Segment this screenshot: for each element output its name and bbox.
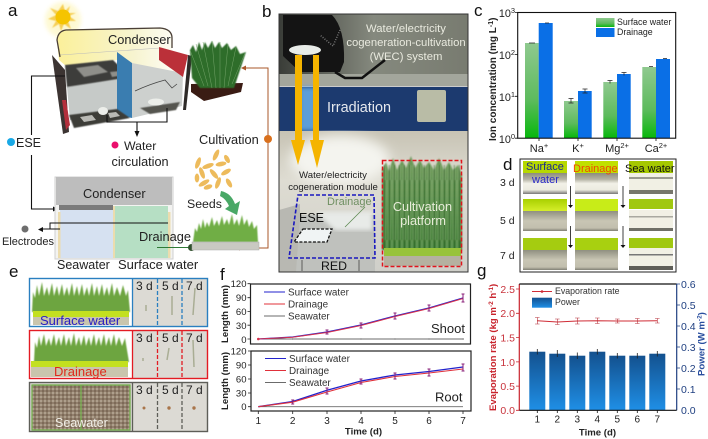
- y-axis title: Ion concentration (mg L: [488, 27, 499, 141]
- x-axis labels: K: [572, 143, 579, 155]
- y-axis ticks: [499, 6, 515, 146]
- y-axis ticks: 0: [511, 132, 515, 141]
- x-axis labels: 6: [635, 414, 641, 426]
- frame: [57, 28, 172, 57]
- y-axis ticks: 2: [511, 48, 515, 57]
- legend: [532, 286, 620, 308]
- y-axis ticks: [231, 346, 246, 413]
- bars: drainage: [539, 23, 670, 138]
- title: WEC system: (WEC) system: [370, 51, 442, 63]
- line: seawater: [258, 406, 463, 408]
- label: ESE: ESE: [299, 211, 324, 225]
- x-axis labels: 7: [655, 414, 661, 426]
- label: Root: Root: [435, 390, 463, 405]
- right axis title: ): [696, 312, 708, 315]
- icon: grass tray: [190, 41, 246, 101]
- legend: Drainage: [289, 366, 330, 377]
- legend: Power: [555, 297, 580, 307]
- panel d: root growth photos: [500, 159, 676, 272]
- right axis ticks: 0.5: [681, 300, 696, 312]
- right axis ticks: 0.1: [681, 384, 696, 396]
- left axis title: -1: [488, 287, 495, 293]
- label: seawater and surface water chambers: Surface water: [118, 257, 199, 272]
- label: seawater and surface water chambers: [57, 257, 199, 272]
- arrow: seeds to grass: [220, 191, 240, 215]
- x-axis labels: 2+: [620, 141, 630, 150]
- error bars: evaporation: [535, 318, 660, 324]
- label: Cultivation platform: [393, 200, 452, 228]
- error bars: [291, 364, 464, 404]
- error bars: [529, 23, 667, 103]
- line: surface water: [258, 367, 463, 407]
- x-axis labels: Na: [530, 143, 544, 155]
- x-axis labels: [530, 141, 668, 155]
- y-axis title: Length (mm): [220, 352, 231, 410]
- labels: days: 7 d: [186, 331, 203, 345]
- label: Condenser (schematic): Condenser: [83, 186, 146, 201]
- row: seawater: [30, 382, 208, 432]
- connector: ESE to device: [32, 76, 65, 209]
- label: Cultivation platform: platform: [400, 214, 446, 228]
- legend: Seawater: [289, 378, 331, 389]
- y-axis ticks: 30: [236, 321, 246, 332]
- panel d: root growth photos: water: [531, 174, 559, 186]
- y-axis ticks: 90: [236, 293, 246, 304]
- label: RED: RED: [321, 259, 347, 273]
- y-axis ticks: 10: [499, 92, 511, 104]
- left water wall: [67, 78, 117, 120]
- legend: [264, 288, 350, 323]
- panel f: root length line chart: [220, 346, 471, 438]
- callout: module outline: [289, 195, 375, 258]
- y-axis ticks: [231, 279, 246, 346]
- label: Water/electricity cogeneration module: [288, 170, 378, 193]
- left axis ticks: 1.0: [500, 357, 515, 369]
- panel b: WEC system photo: [279, 14, 468, 273]
- y-axis ticks: 10: [499, 50, 511, 62]
- left axis title: ): [488, 284, 499, 287]
- label: Surface water: Surface water: [40, 313, 121, 328]
- panel g: evaporation and power chart: [488, 279, 708, 438]
- legend: Drainage: [288, 300, 329, 311]
- y-axis ticks: 90: [236, 360, 246, 372]
- schematic: condenser cross section: [55, 177, 173, 259]
- photo: cultivation grass: [382, 156, 462, 266]
- labels: days: 3 d: [136, 279, 153, 293]
- right axis ticks: 0.4: [681, 321, 696, 333]
- photo: upper wall: [279, 14, 468, 86]
- y-axis ticks: 120: [231, 346, 246, 358]
- x-axis labels: 2: [555, 414, 561, 426]
- arrows: irradiation: [291, 55, 324, 168]
- bars: surface water: [525, 43, 656, 138]
- label: Condenser: Condenser: [108, 32, 171, 47]
- legend: [596, 17, 671, 37]
- right axis ticks: 0.6: [681, 279, 696, 291]
- labels: days: 3 d: [136, 383, 153, 397]
- y-axis ticks: 30: [236, 388, 246, 400]
- legend: Surface water: [288, 288, 350, 299]
- right axis ticks: 0.2: [681, 363, 696, 375]
- column: sea water: [629, 161, 673, 270]
- y-axis ticks: 3: [511, 6, 515, 15]
- label: Water circulation: [112, 139, 169, 169]
- panel label a: a: [8, 1, 18, 20]
- label: Seawater: Seawater: [55, 416, 108, 430]
- panel label g: g: [477, 261, 486, 280]
- label: Water circulation: Water: [124, 139, 156, 153]
- left axis title: h: [488, 293, 499, 301]
- left axis title: Evaporation rate (kg m: [488, 307, 499, 411]
- panel label b: b: [262, 2, 271, 21]
- panel e: seedling photos: [30, 278, 208, 432]
- right axis ticks: 0.3: [681, 342, 696, 354]
- line: seawater: [258, 338, 463, 340]
- x-axis labels: +: [579, 141, 584, 150]
- connector: cultivation loop: [235, 66, 272, 250]
- photo: blue band: [279, 87, 468, 131]
- x-axis labels: 6: [426, 416, 432, 427]
- legend: Surface water: [617, 17, 671, 27]
- labels: columns: Surface: [526, 161, 564, 173]
- y-axis ticks: 0: [241, 335, 246, 346]
- x-axis labels: 7: [460, 416, 466, 427]
- line: drainage: [258, 369, 463, 407]
- label: Water/electricity cogeneration module: cogeneration module: [288, 182, 378, 193]
- arrows: RED pointers: [302, 260, 359, 271]
- bars: power: [529, 352, 665, 410]
- left axis ticks: [500, 284, 515, 417]
- callout: ESE outline: [294, 229, 332, 242]
- photo: lower bench: [279, 131, 468, 272]
- left axis ticks: 0.0: [500, 405, 515, 417]
- label: Water/electricity cogeneration module: Water/electricity: [299, 170, 367, 181]
- connector: electrodes: [42, 223, 168, 229]
- label: Drainage: Drainage: [327, 196, 372, 208]
- line: surface water: [258, 298, 463, 339]
- axes: [518, 12, 676, 138]
- ESE plane: [65, 60, 130, 87]
- panel c: ion concentration bar chart: [488, 6, 676, 155]
- label: Water circulation: circulation: [112, 155, 169, 169]
- left post: [52, 55, 69, 134]
- legend: Surface water: [289, 354, 351, 365]
- x-axis labels: 3: [575, 414, 581, 426]
- x-axis labels: [535, 414, 661, 426]
- label: Electrodes: Electrodes: [2, 236, 54, 248]
- panel a: water/electricity device diagram: [2, 2, 272, 259]
- panel label d: d: [503, 155, 512, 174]
- labels: days: [500, 177, 515, 262]
- x-axis labels: Mg: [605, 143, 620, 155]
- connector: water circulation bracket: [107, 108, 167, 134]
- label: Cultivation platform: Cultivation: [393, 200, 452, 214]
- left axis ticks: 1.5: [500, 332, 515, 344]
- labels: days: [136, 279, 203, 397]
- evaporation chamber 3D illustration: [52, 28, 192, 134]
- labels: days: 7 d: [186, 383, 203, 397]
- labels: days: 3 d: [500, 177, 515, 189]
- x-axis labels: 1: [256, 416, 262, 427]
- blue divider: [117, 52, 132, 118]
- x-axis labels: 4: [595, 414, 601, 426]
- column: surface water: [523, 161, 567, 270]
- label: Drainage: Drainage: [54, 364, 107, 379]
- x-axis labels: 1: [535, 414, 541, 426]
- x-axis labels: Ca: [645, 143, 659, 155]
- x-axis labels: 3: [324, 416, 330, 427]
- row: surface water: [30, 278, 208, 328]
- label: Drainage: Drainage: [139, 229, 191, 244]
- labels: days: 5 d: [500, 215, 515, 227]
- panel label e: e: [9, 262, 18, 281]
- labels: days: 5 d: [162, 279, 179, 293]
- right axis ticks: 0.0: [681, 405, 696, 417]
- red panel: [159, 47, 188, 77]
- legend: Evaporation rate: [555, 286, 620, 296]
- x-axis labels: 5: [615, 414, 621, 426]
- icon: seeds: [194, 149, 233, 191]
- legend: Drainage: [617, 27, 653, 37]
- left axis ticks: 2.5: [500, 284, 515, 296]
- x-axis title: Time (d): [345, 426, 382, 438]
- y-axis title: ): [488, 18, 499, 21]
- label: Irradiation: Irradiation: [327, 100, 391, 116]
- column: drainage: [575, 161, 618, 270]
- left axis ticks: 2.0: [500, 308, 515, 320]
- label: Seeds: Seeds: [187, 197, 222, 211]
- label: Electrodes: [2, 226, 54, 248]
- right axis ticks: [681, 279, 696, 417]
- floor mottling: [69, 109, 130, 128]
- x-axis labels: [256, 416, 466, 427]
- x-axis labels: 5: [392, 416, 398, 427]
- y-axis ticks: 60: [236, 374, 246, 386]
- x-axis labels: 2+: [659, 141, 668, 150]
- icon: sun: [45, 2, 81, 38]
- photo: lamp: [283, 15, 385, 78]
- labels: days: 3 d: [136, 331, 153, 345]
- labels: days: 7 d: [500, 250, 515, 262]
- label: Shoot: Shoot: [431, 321, 465, 336]
- line: drainage: [258, 298, 463, 339]
- arrows: time progression: [570, 186, 623, 245]
- right axis title: Power (W m: [696, 321, 708, 376]
- legend: Seawater: [288, 312, 330, 323]
- y-axis ticks: 10: [499, 134, 511, 146]
- right water wall: [132, 63, 183, 118]
- panel label f: f: [220, 265, 225, 284]
- y-axis title: Length (mm): [220, 285, 231, 343]
- labels: days: 5 d: [162, 331, 179, 345]
- left axis ticks: 0.5: [500, 381, 515, 393]
- chamber air space: [57, 28, 186, 80]
- label: seawater and surface water chambers: Seawater: [57, 258, 110, 272]
- y-axis ticks: 0: [241, 402, 246, 413]
- icon: grass tray (sprouts): [192, 214, 259, 250]
- panel d: root growth photos: Sea water: [625, 163, 675, 175]
- x-axis labels: 2: [290, 416, 296, 427]
- y-axis title: -1: [488, 21, 495, 27]
- x-axis labels: +: [544, 141, 549, 150]
- y-axis ticks: 1: [511, 90, 515, 99]
- connector: drainage: [157, 246, 190, 248]
- callout: cultivation platform outline: [382, 160, 462, 266]
- title: WEC system: Water/electricity: [366, 23, 446, 35]
- x-axis labels: 4: [358, 416, 364, 427]
- panel d: root growth photos: Drainage: [573, 163, 618, 175]
- y-axis ticks: 120: [231, 279, 246, 290]
- y-axis ticks: 60: [236, 307, 246, 318]
- label: ESE: ESE: [16, 136, 41, 150]
- labels: days: 7 d: [186, 279, 203, 293]
- left axis title: -2: [488, 301, 495, 307]
- x-axis title: Time (d): [579, 428, 616, 438]
- line: evaporation rate: [537, 321, 657, 322]
- error bars: power: [537, 349, 657, 359]
- panel label c: c: [474, 1, 483, 20]
- connector: drainage pointer: [345, 207, 365, 227]
- labels: days: 5 d: [162, 383, 179, 397]
- label: Cultivation: Cultivation: [199, 132, 259, 147]
- legend: [265, 354, 351, 389]
- title: WEC system: [346, 23, 466, 63]
- error bars and markers: [326, 294, 464, 334]
- title: WEC system: cogeneration-cultivation: [346, 37, 466, 49]
- axes: [518, 284, 520, 410]
- panel f: shoot length line chart: [220, 279, 470, 346]
- row: drainage: [30, 330, 208, 379]
- y-axis ticks: 10: [499, 8, 511, 20]
- right axis title: -2: [696, 315, 704, 321]
